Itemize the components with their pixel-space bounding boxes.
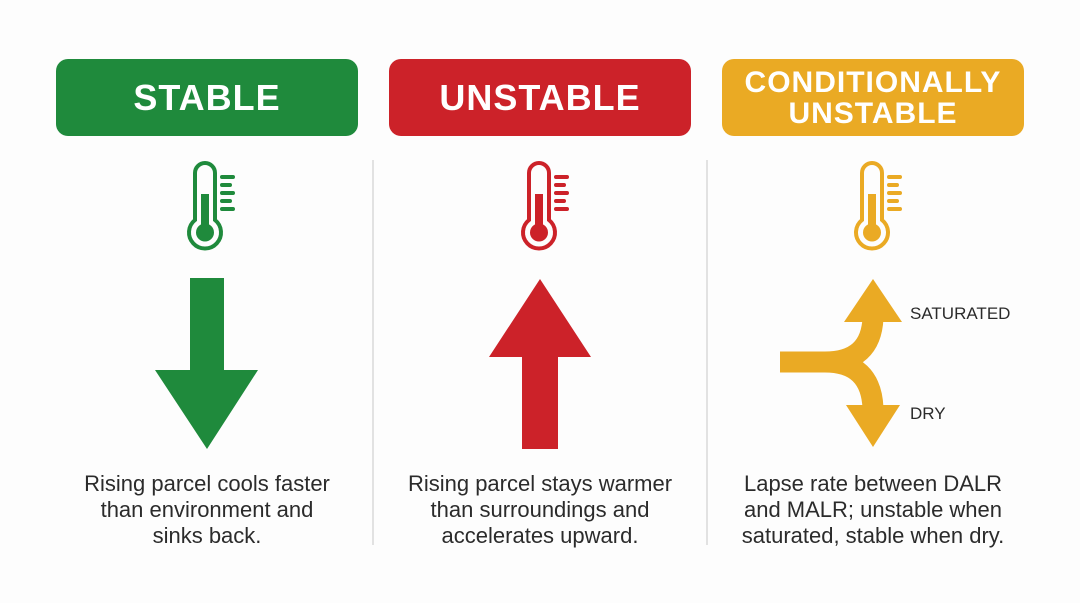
text: unstable: accelerates upward. <box>442 523 638 548</box>
text: stable: sinks back. <box>153 523 261 548</box>
text: stable: Rising parcel cools faster <box>84 471 330 496</box>
label: saturated: SATURATED <box>910 304 1010 323</box>
divider <box>372 160 374 545</box>
header: stable <box>56 59 358 136</box>
icon: thermometer green <box>187 161 235 250</box>
header: conditionally unstable <box>722 59 1024 136</box>
header: unstable <box>389 59 691 136</box>
icon: thermometer yellow <box>854 161 902 250</box>
text: stable: than environment and <box>101 497 313 522</box>
text: conditional: saturated, stable when dry. <box>742 523 1004 548</box>
header: conditionally unstable: UNSTABLE <box>788 96 958 130</box>
header: unstable: UNSTABLE <box>439 76 641 118</box>
text: unstable: Rising parcel stays warmer <box>408 471 672 496</box>
text: unstable: than surroundings and <box>431 497 649 522</box>
text: conditional: and MALR; unstable when <box>744 497 1002 522</box>
text: conditional: Lapse rate between DALR <box>744 471 1002 496</box>
header: stable: STABLE <box>133 76 281 118</box>
icon: thermometer red <box>521 161 569 250</box>
text: stable <box>84 471 330 548</box>
header: conditionally unstable: CONDITIONALLY <box>745 66 1001 98</box>
label: dry: DRY <box>910 404 946 423</box>
text: unstable <box>408 471 672 548</box>
text: conditional <box>742 471 1004 548</box>
